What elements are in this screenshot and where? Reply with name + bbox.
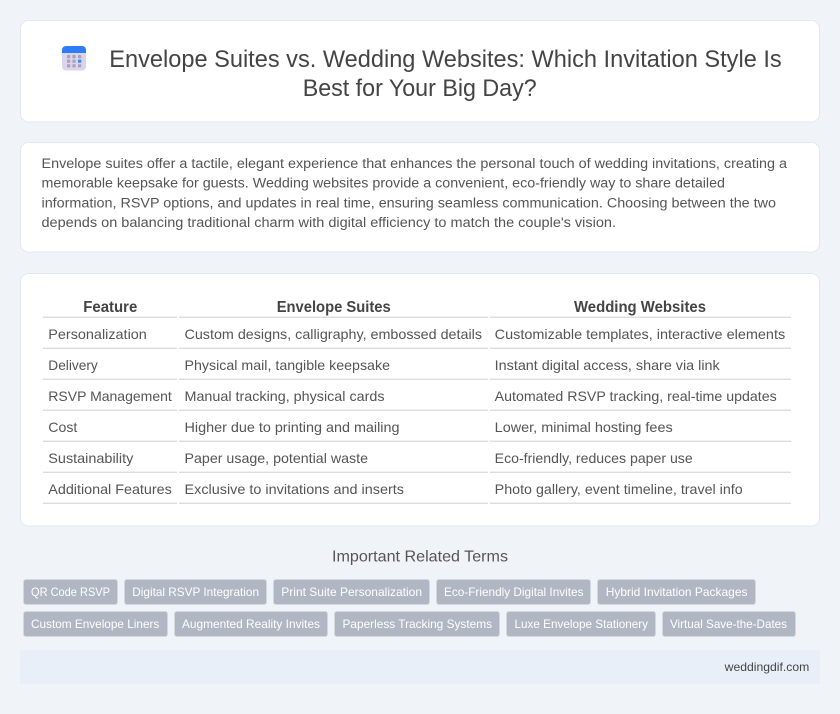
row: additional features: Photo gallery, event timeline, travel info <box>495 481 743 497</box>
panel: introduction text <box>20 142 820 252</box>
row: RSVP management <box>48 388 777 404</box>
row: cost <box>48 419 673 435</box>
panel: introduction text: memorable keepsake for guests. Wedding websites provide a convenient, eco-friendly way to share detailed <box>42 176 725 192</box>
row: personalization: Customizable templates, interactive elements <box>495 326 785 342</box>
row: additional features: Additional Features <box>48 481 172 497</box>
related term tags: QR Code RSVP <box>31 585 110 599</box>
footer <box>20 650 820 684</box>
row: RSVP management: Manual tracking, physical cards <box>184 388 384 404</box>
table header row: Envelope Suites <box>277 299 391 316</box>
title: Best for Your Big Day? <box>303 75 537 102</box>
row: delivery: Physical mail, tangible keepsake <box>184 357 390 373</box>
panel: header <box>20 20 820 122</box>
table header row: Feature <box>83 299 137 316</box>
related term tags: Digital RSVP Integration <box>132 585 259 599</box>
row: personalization <box>48 326 785 342</box>
row: sustainability: Paper usage, potential waste <box>184 450 368 466</box>
footer: weddingdif.com <box>724 660 809 674</box>
row: cost: Higher due to printing and mailing <box>184 419 400 435</box>
icon: calendar <box>62 46 86 70</box>
related term tags: Augmented Reality Invites <box>182 617 320 631</box>
title: Envelope Suites vs. Wedding Websites: Which Invitation Style Is <box>109 46 782 73</box>
row: delivery <box>48 357 721 373</box>
panel: introduction text: depends on balancing traditional charm with digital efficiency to match the couple's vision. <box>42 215 616 231</box>
related term tags: Custom Envelope Liners <box>31 617 159 631</box>
related term tags <box>24 580 796 636</box>
row: sustainability: Sustainability <box>48 450 133 466</box>
title <box>109 46 782 102</box>
row: RSVP management: RSVP Management <box>48 388 172 404</box>
related term tags: Virtual Save-the-Dates <box>670 617 787 631</box>
panel: introduction text: Envelope suites offer a tactile, elegant experience that enhances the personal touch of wedding invitations, creating a <box>42 156 787 172</box>
row: additional features <box>48 481 743 497</box>
table header row: Wedding Websites <box>574 299 706 316</box>
panel: introduction text: information, RSVP options, and updates in real time, ensuring seamless communication. Choosing between the two <box>42 196 776 212</box>
heading: important related terms: Important Related Terms <box>332 549 508 566</box>
row: RSVP management: Automated RSVP tracking, real-time updates <box>495 388 777 404</box>
row: cost: Cost <box>48 419 77 435</box>
row: additional features: Exclusive to invitations and inserts <box>184 481 404 497</box>
table header row <box>83 299 706 316</box>
row: sustainability <box>48 450 693 466</box>
panel: comparison table <box>20 274 820 526</box>
related term tags: Paperless Tracking Systems <box>342 617 492 631</box>
row: personalization: Custom designs, calligraphy, embossed details <box>184 326 482 342</box>
row: delivery: Instant digital access, share via link <box>495 357 721 373</box>
related term tags: Eco-Friendly Digital Invites <box>444 585 584 599</box>
row: sustainability: Eco-friendly, reduces paper use <box>495 450 693 466</box>
related term tags: Hybrid Invitation Packages <box>606 585 748 599</box>
related term tags: Luxe Envelope Stationery <box>514 617 648 631</box>
row: cost: Lower, minimal hosting fees <box>495 419 673 435</box>
related term tags: Print Suite Personalization <box>281 585 422 599</box>
row: personalization: Personalization <box>48 326 147 342</box>
row: delivery: Delivery <box>48 357 98 373</box>
